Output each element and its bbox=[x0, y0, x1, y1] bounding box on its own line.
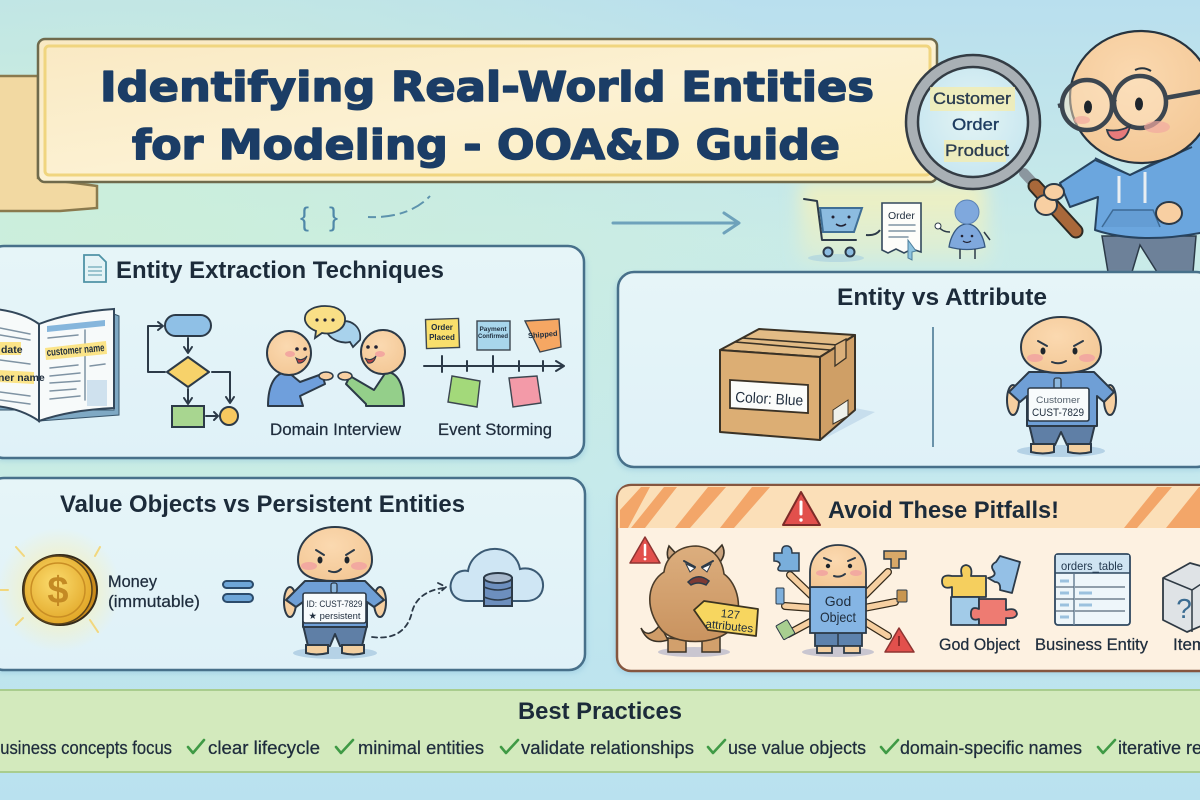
handle bbox=[1024, 173, 1037, 187]
icon: document bbox=[84, 255, 106, 282]
magnifying glass bbox=[906, 55, 1076, 231]
domain interview people bbox=[267, 306, 405, 406]
event storming timeline: Placed bbox=[429, 333, 455, 342]
warning stripes bbox=[620, 487, 1200, 528]
head bbox=[1070, 31, 1200, 163]
hood collar bbox=[1095, 147, 1192, 175]
panel: entity vs attribute bbox=[616, 272, 1200, 470]
flowchart bbox=[148, 315, 238, 427]
icon: cardboard box: Color: Blue bbox=[735, 389, 804, 410]
icon: open book: customer name bbox=[46, 342, 105, 359]
connector bbox=[866, 230, 880, 235]
label: god object: God Object bbox=[939, 635, 1020, 654]
lens bbox=[906, 55, 1040, 189]
hoodie bbox=[1060, 130, 1200, 238]
character: attribute monster bbox=[641, 545, 758, 657]
icon: open book: date bbox=[1, 344, 23, 356]
check bbox=[1098, 740, 1115, 753]
hand right bbox=[1156, 202, 1182, 224]
icon: shopping cart bbox=[804, 199, 864, 262]
heading: Avoid These Pitfalls! bbox=[828, 497, 1059, 524]
character: customer entity: CUST-7829 bbox=[1032, 407, 1084, 419]
check bbox=[881, 740, 898, 753]
icon: orders table bbox=[1055, 554, 1130, 625]
attributes tag: attributes bbox=[705, 619, 754, 636]
heading: Entity vs Attribute bbox=[837, 284, 1047, 311]
small warning icon bbox=[630, 537, 660, 563]
heading: Value Objects vs Persistent Entities bbox=[60, 491, 465, 518]
dashed doodle bbox=[368, 196, 430, 217]
practice: validate relationships: validate relationships bbox=[521, 738, 694, 758]
label: money immutable: (immutable) bbox=[108, 592, 200, 611]
character: customer entity: Customer bbox=[1036, 395, 1080, 406]
pants bbox=[1102, 236, 1196, 272]
event storming timeline: Payment bbox=[479, 326, 507, 333]
event storming timeline: Shipped bbox=[528, 329, 558, 340]
practice: domain-specific names: domain-specific names bbox=[900, 738, 1082, 758]
practice: minimal entities: minimal entities bbox=[358, 738, 484, 758]
held puzzle piece bbox=[774, 546, 799, 571]
divider bbox=[932, 327, 934, 447]
character: god object: Object bbox=[820, 609, 856, 625]
event storming timeline bbox=[424, 318, 564, 407]
icon: puzzle pieces bbox=[942, 556, 1020, 625]
panel: avoid these pitfalls bbox=[615, 485, 1200, 674]
event storming timeline: Confirmed bbox=[478, 334, 508, 340]
icon: gold coin bbox=[0, 528, 121, 652]
label: money immutable: Money bbox=[108, 572, 157, 591]
character: god object bbox=[774, 545, 914, 657]
character: persistent entity: ★ persistent bbox=[308, 611, 361, 622]
icon: order receipt bbox=[882, 203, 921, 260]
equals sign bbox=[223, 581, 253, 602]
icon: customer figure bbox=[935, 200, 990, 259]
banner ribbon fold bbox=[0, 76, 97, 211]
label: event storming: Event Storming bbox=[438, 420, 552, 439]
attributes tag: 127 bbox=[720, 608, 740, 622]
character: customer entity bbox=[1007, 317, 1116, 457]
lens word product: Product bbox=[945, 141, 1009, 160]
icon: orders table: orders_table bbox=[1061, 559, 1123, 573]
warning icon bbox=[783, 492, 820, 525]
attributes tag bbox=[694, 601, 758, 636]
check bbox=[708, 740, 725, 753]
character: persistent entity: ID: CUST-7829 bbox=[306, 599, 362, 610]
title line 2: for Modeling - OOA&D Guide bbox=[132, 121, 840, 169]
icon: order receipt: Order bbox=[888, 210, 915, 222]
icon: cloud database bbox=[451, 549, 543, 606]
title line 1: Identifying Real-World Entities bbox=[100, 63, 874, 111]
curly braces doodle: { } bbox=[300, 202, 338, 232]
warning small bbox=[885, 628, 914, 652]
glasses bbox=[1058, 76, 1200, 130]
event storming timeline: Order bbox=[431, 323, 453, 332]
character: persistent entity bbox=[284, 527, 386, 659]
heading: Entity Extraction Techniques bbox=[116, 257, 444, 284]
icon: mystery cube: ? bbox=[1176, 593, 1192, 624]
held t-piece bbox=[884, 551, 906, 568]
hood strings bbox=[1119, 172, 1145, 203]
character: developer with glasses bbox=[1058, 31, 1200, 272]
dashed arrow bbox=[372, 583, 446, 638]
title banner bbox=[38, 39, 937, 182]
lens highlights bbox=[930, 87, 1015, 111]
panel: value objects vs persistent entities bbox=[0, 478, 587, 673]
practice: clear lifecycle: clear lifecycle bbox=[208, 738, 320, 758]
icon: open book bbox=[0, 309, 119, 421]
box label bbox=[730, 380, 808, 413]
label: money immutable bbox=[108, 572, 200, 611]
lens word customer: Customer bbox=[933, 89, 1011, 108]
yellow spotlight beam bbox=[800, 183, 990, 262]
panel: entity extraction techniques bbox=[0, 246, 586, 461]
lens word order: Order bbox=[952, 115, 999, 134]
icon: mystery cube bbox=[1163, 563, 1200, 632]
panel: best practices bbox=[0, 690, 1200, 772]
hoodie pocket bbox=[1102, 210, 1160, 227]
check bbox=[336, 740, 353, 753]
arrow doodle bbox=[613, 213, 739, 233]
label: domain interview: Domain Interview bbox=[270, 420, 402, 439]
heading: Best Practices bbox=[518, 698, 682, 725]
icon: gold coin: $ bbox=[47, 570, 69, 612]
header band bbox=[618, 486, 1200, 528]
speech bubbles bbox=[328, 321, 360, 347]
practice: use value objects: use value objects bbox=[728, 738, 866, 758]
god object text: God bbox=[825, 593, 851, 609]
label: business entity: Business Entity bbox=[1035, 635, 1148, 654]
check bbox=[188, 740, 204, 753]
check bbox=[501, 740, 518, 753]
icon: cardboard box bbox=[720, 329, 875, 441]
